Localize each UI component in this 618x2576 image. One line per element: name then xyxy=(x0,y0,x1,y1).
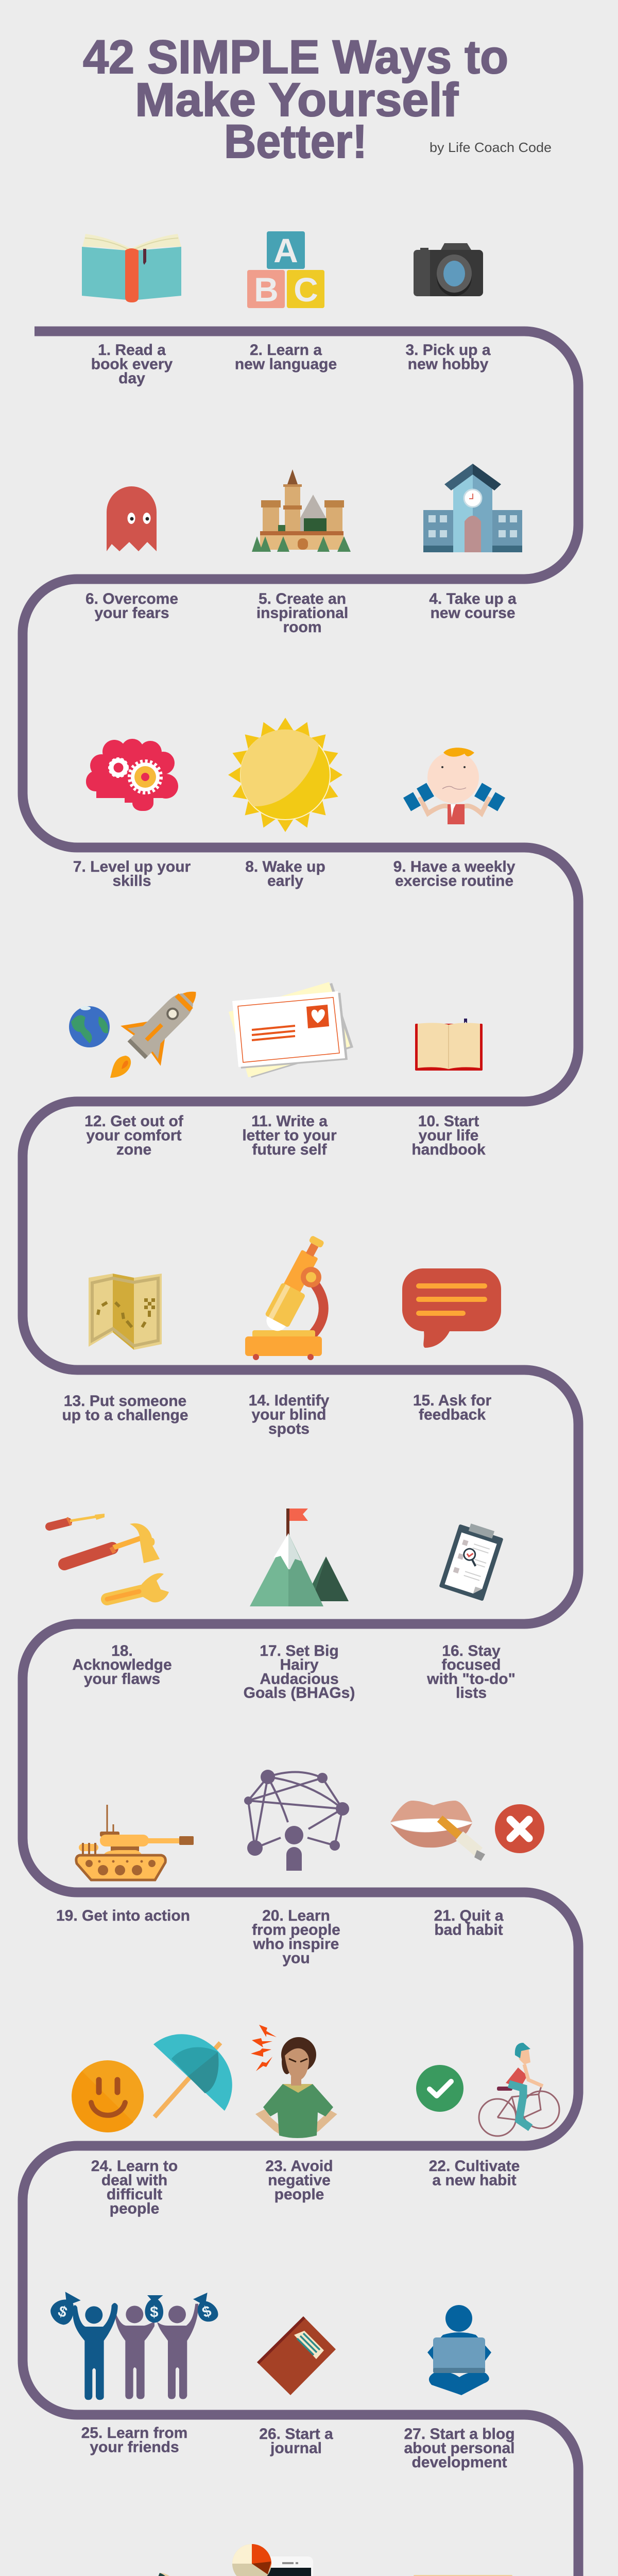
label: 20. Learn xyxy=(262,1907,330,1924)
icon: three people with money bags: $ xyxy=(200,2302,214,2321)
label: your blind xyxy=(251,1406,327,1423)
label: journal xyxy=(270,2440,322,2456)
icon: angry woman xyxy=(251,2025,333,2138)
icon: phone with chat and clock xyxy=(232,2544,313,2576)
icon: castle xyxy=(252,469,351,552)
step 19: get into action xyxy=(56,1805,194,1924)
icon: treasure map xyxy=(89,1274,162,1350)
label: feedback xyxy=(419,1406,486,1423)
label: 2. Learn a xyxy=(250,342,322,359)
label: your life xyxy=(419,1127,478,1144)
step 18: acknowledge your flaws xyxy=(49,1514,172,1687)
icon: open book xyxy=(82,234,181,302)
label: development xyxy=(411,2454,507,2471)
step 29: reduce chat time xyxy=(232,2544,354,2576)
step 11: letter to future self xyxy=(229,982,353,1158)
label: Goals (BHAGs) xyxy=(244,1685,355,1702)
label: 22. Cultivate xyxy=(429,2158,520,2175)
icon: three people with money bags: $ xyxy=(56,2302,70,2321)
label: room xyxy=(283,619,321,636)
label: handbook xyxy=(411,1141,486,1158)
label: Hairy xyxy=(280,1656,319,1673)
icon: mountain with flag xyxy=(250,1509,349,1606)
step 13: put someone up to a challenge xyxy=(62,1274,188,1424)
icon: clipboard xyxy=(439,1520,505,1601)
label: Audacious xyxy=(260,1670,339,1687)
icon: ghost xyxy=(107,486,157,551)
label: day xyxy=(118,370,145,387)
step 30: learn chess xyxy=(36,2573,180,2576)
icon: earth xyxy=(69,1006,110,1047)
label: your flaws xyxy=(84,1670,160,1687)
step 24: deal with difficult people xyxy=(72,2034,232,2217)
step 28: get a mentor or coach xyxy=(414,2575,512,2576)
step 25: learn from your friends xyxy=(50,2292,218,2455)
label: 17. Set Big xyxy=(260,1642,339,1659)
label: who inspire xyxy=(253,1936,339,1953)
label: skills xyxy=(112,873,151,889)
label: 10. Start xyxy=(418,1113,479,1130)
step 9: weekly exercise routine xyxy=(393,748,516,889)
step 3: pick up a new hobby xyxy=(405,243,491,373)
label: 8. Wake up xyxy=(245,858,325,875)
step 16: to-do lists xyxy=(426,1520,516,1702)
label: 16. Stay xyxy=(442,1642,501,1659)
label: 13. Put someone xyxy=(64,1393,186,1410)
icon: person with laptop xyxy=(427,2305,491,2395)
label: 19. Get into action xyxy=(56,1907,190,1924)
step 6: overcome your fears xyxy=(85,486,178,621)
icon: journal xyxy=(257,2316,336,2395)
step 2: learn a new language xyxy=(235,231,337,373)
icon: ABC blocks: A xyxy=(273,231,298,269)
step 23: avoid negative people xyxy=(251,2025,333,2203)
icon: presenter at board xyxy=(414,2575,512,2576)
label: spots xyxy=(268,1420,310,1437)
icon: tools xyxy=(49,1514,169,1602)
title: Make Yourself xyxy=(135,74,458,126)
byline: by Life Coach Code xyxy=(430,140,552,155)
label: with "to-do" xyxy=(426,1670,516,1687)
icon: envelope xyxy=(229,982,353,1078)
label: 6. Overcome xyxy=(85,590,178,607)
icon: ABC blocks: B xyxy=(254,270,279,309)
label: 27. Start a blog xyxy=(404,2426,515,2443)
title: 42 SIMPLE Ways to xyxy=(83,31,508,83)
label: your comfort xyxy=(86,1127,182,1144)
step 1: read a book xyxy=(82,234,181,387)
label: 3. Pick up a xyxy=(405,342,491,359)
icon: knight xyxy=(152,2573,180,2576)
label: up to a challenge xyxy=(62,1406,188,1424)
label: 9. Have a weekly xyxy=(393,858,516,875)
icon: school xyxy=(423,464,522,552)
label: 18. xyxy=(111,1642,133,1659)
label: your fears xyxy=(94,605,169,621)
icon: speech bubble xyxy=(402,1268,501,1348)
icon: lips with cigarette xyxy=(390,1801,485,1861)
label: a new habit xyxy=(432,2172,517,2189)
label: about personal xyxy=(404,2440,515,2456)
label: deal with xyxy=(101,2172,167,2189)
icon: network around person xyxy=(244,1770,349,1871)
label: Acknowledge xyxy=(72,1656,172,1673)
icon: red handbook xyxy=(415,1019,483,1071)
icon: microscope xyxy=(245,1233,332,1360)
label: inspirational xyxy=(256,605,348,621)
step 21: quit a bad habit xyxy=(390,1801,544,1938)
label: 15. Ask for xyxy=(413,1392,491,1409)
label: zone xyxy=(116,1141,151,1158)
icon: cyclist xyxy=(479,2043,559,2136)
label: focused xyxy=(441,1656,501,1673)
label: you xyxy=(282,1950,310,1967)
step 26: start a journal xyxy=(257,2316,336,2456)
icon: umbrella xyxy=(153,2034,232,2117)
step 8: wake up early xyxy=(228,718,342,889)
label: negative xyxy=(268,2172,331,2189)
label: 12. Get out of xyxy=(84,1113,184,1130)
label: early xyxy=(267,873,303,889)
label: 14. Identify xyxy=(249,1392,330,1409)
label: 1. Read a xyxy=(98,342,166,359)
step 4: take up a new course xyxy=(423,464,522,621)
label: bad habit xyxy=(434,1922,503,1938)
label: 11. Write a xyxy=(251,1113,328,1130)
label: new language xyxy=(235,355,337,373)
label: people xyxy=(274,2186,324,2203)
icon: red cross xyxy=(495,1804,544,1853)
icon: rocket xyxy=(110,971,215,1078)
label: 21. Quit a xyxy=(434,1907,504,1924)
step 5: create an inspirational room xyxy=(252,469,351,636)
icon: brain with gears xyxy=(86,739,178,811)
label: from people xyxy=(252,1922,340,1938)
step 14: identify your blind spots xyxy=(245,1233,332,1437)
label: new hobby xyxy=(408,355,489,373)
label: 23. Avoid xyxy=(265,2158,333,2175)
icon: tank xyxy=(76,1805,194,1880)
label: 4. Take up a xyxy=(429,590,517,607)
title xyxy=(83,31,508,168)
icon: three people with money bags xyxy=(50,2292,218,2400)
label: 7. Level up your xyxy=(73,858,191,875)
icon: camera xyxy=(414,243,483,296)
icon: ABC blocks xyxy=(247,231,324,309)
icon: person with dumbbells xyxy=(403,748,505,824)
step 7: level up your skills xyxy=(73,739,191,889)
label: people xyxy=(110,2200,159,2217)
title: Better! xyxy=(224,115,367,168)
label: exercise routine xyxy=(395,873,513,889)
label: 5. Create an xyxy=(259,590,346,607)
icon: ABC blocks: C xyxy=(294,270,318,309)
icon: green check xyxy=(416,2065,464,2112)
icon: three people with money bags: $ xyxy=(150,2303,158,2320)
label: letter to your xyxy=(242,1127,337,1144)
step 10: start your life handbook xyxy=(411,1019,486,1158)
label: book every xyxy=(91,355,173,373)
icon: sun xyxy=(228,718,342,832)
label: your friends xyxy=(90,2439,179,2455)
label: difficult xyxy=(107,2186,162,2203)
step 20: learn from people who inspire you xyxy=(244,1770,349,1967)
icon: smiley xyxy=(72,2060,144,2132)
label: 25. Learn from xyxy=(81,2425,187,2442)
step 22: cultivate a new habit xyxy=(416,2043,559,2189)
label: new course xyxy=(430,605,516,621)
label: 26. Start a xyxy=(259,2426,333,2443)
label: lists xyxy=(456,1685,487,1702)
winding path xyxy=(23,331,578,2576)
step 15: ask for feedback xyxy=(402,1268,501,1423)
label: 24. Learn to xyxy=(91,2158,178,2175)
step 27: start a blog xyxy=(404,2305,515,2471)
label: future self xyxy=(252,1141,328,1158)
step 17: big hairy audacious goals xyxy=(244,1509,355,1702)
step 12: get out of comfort zone xyxy=(69,971,215,1158)
